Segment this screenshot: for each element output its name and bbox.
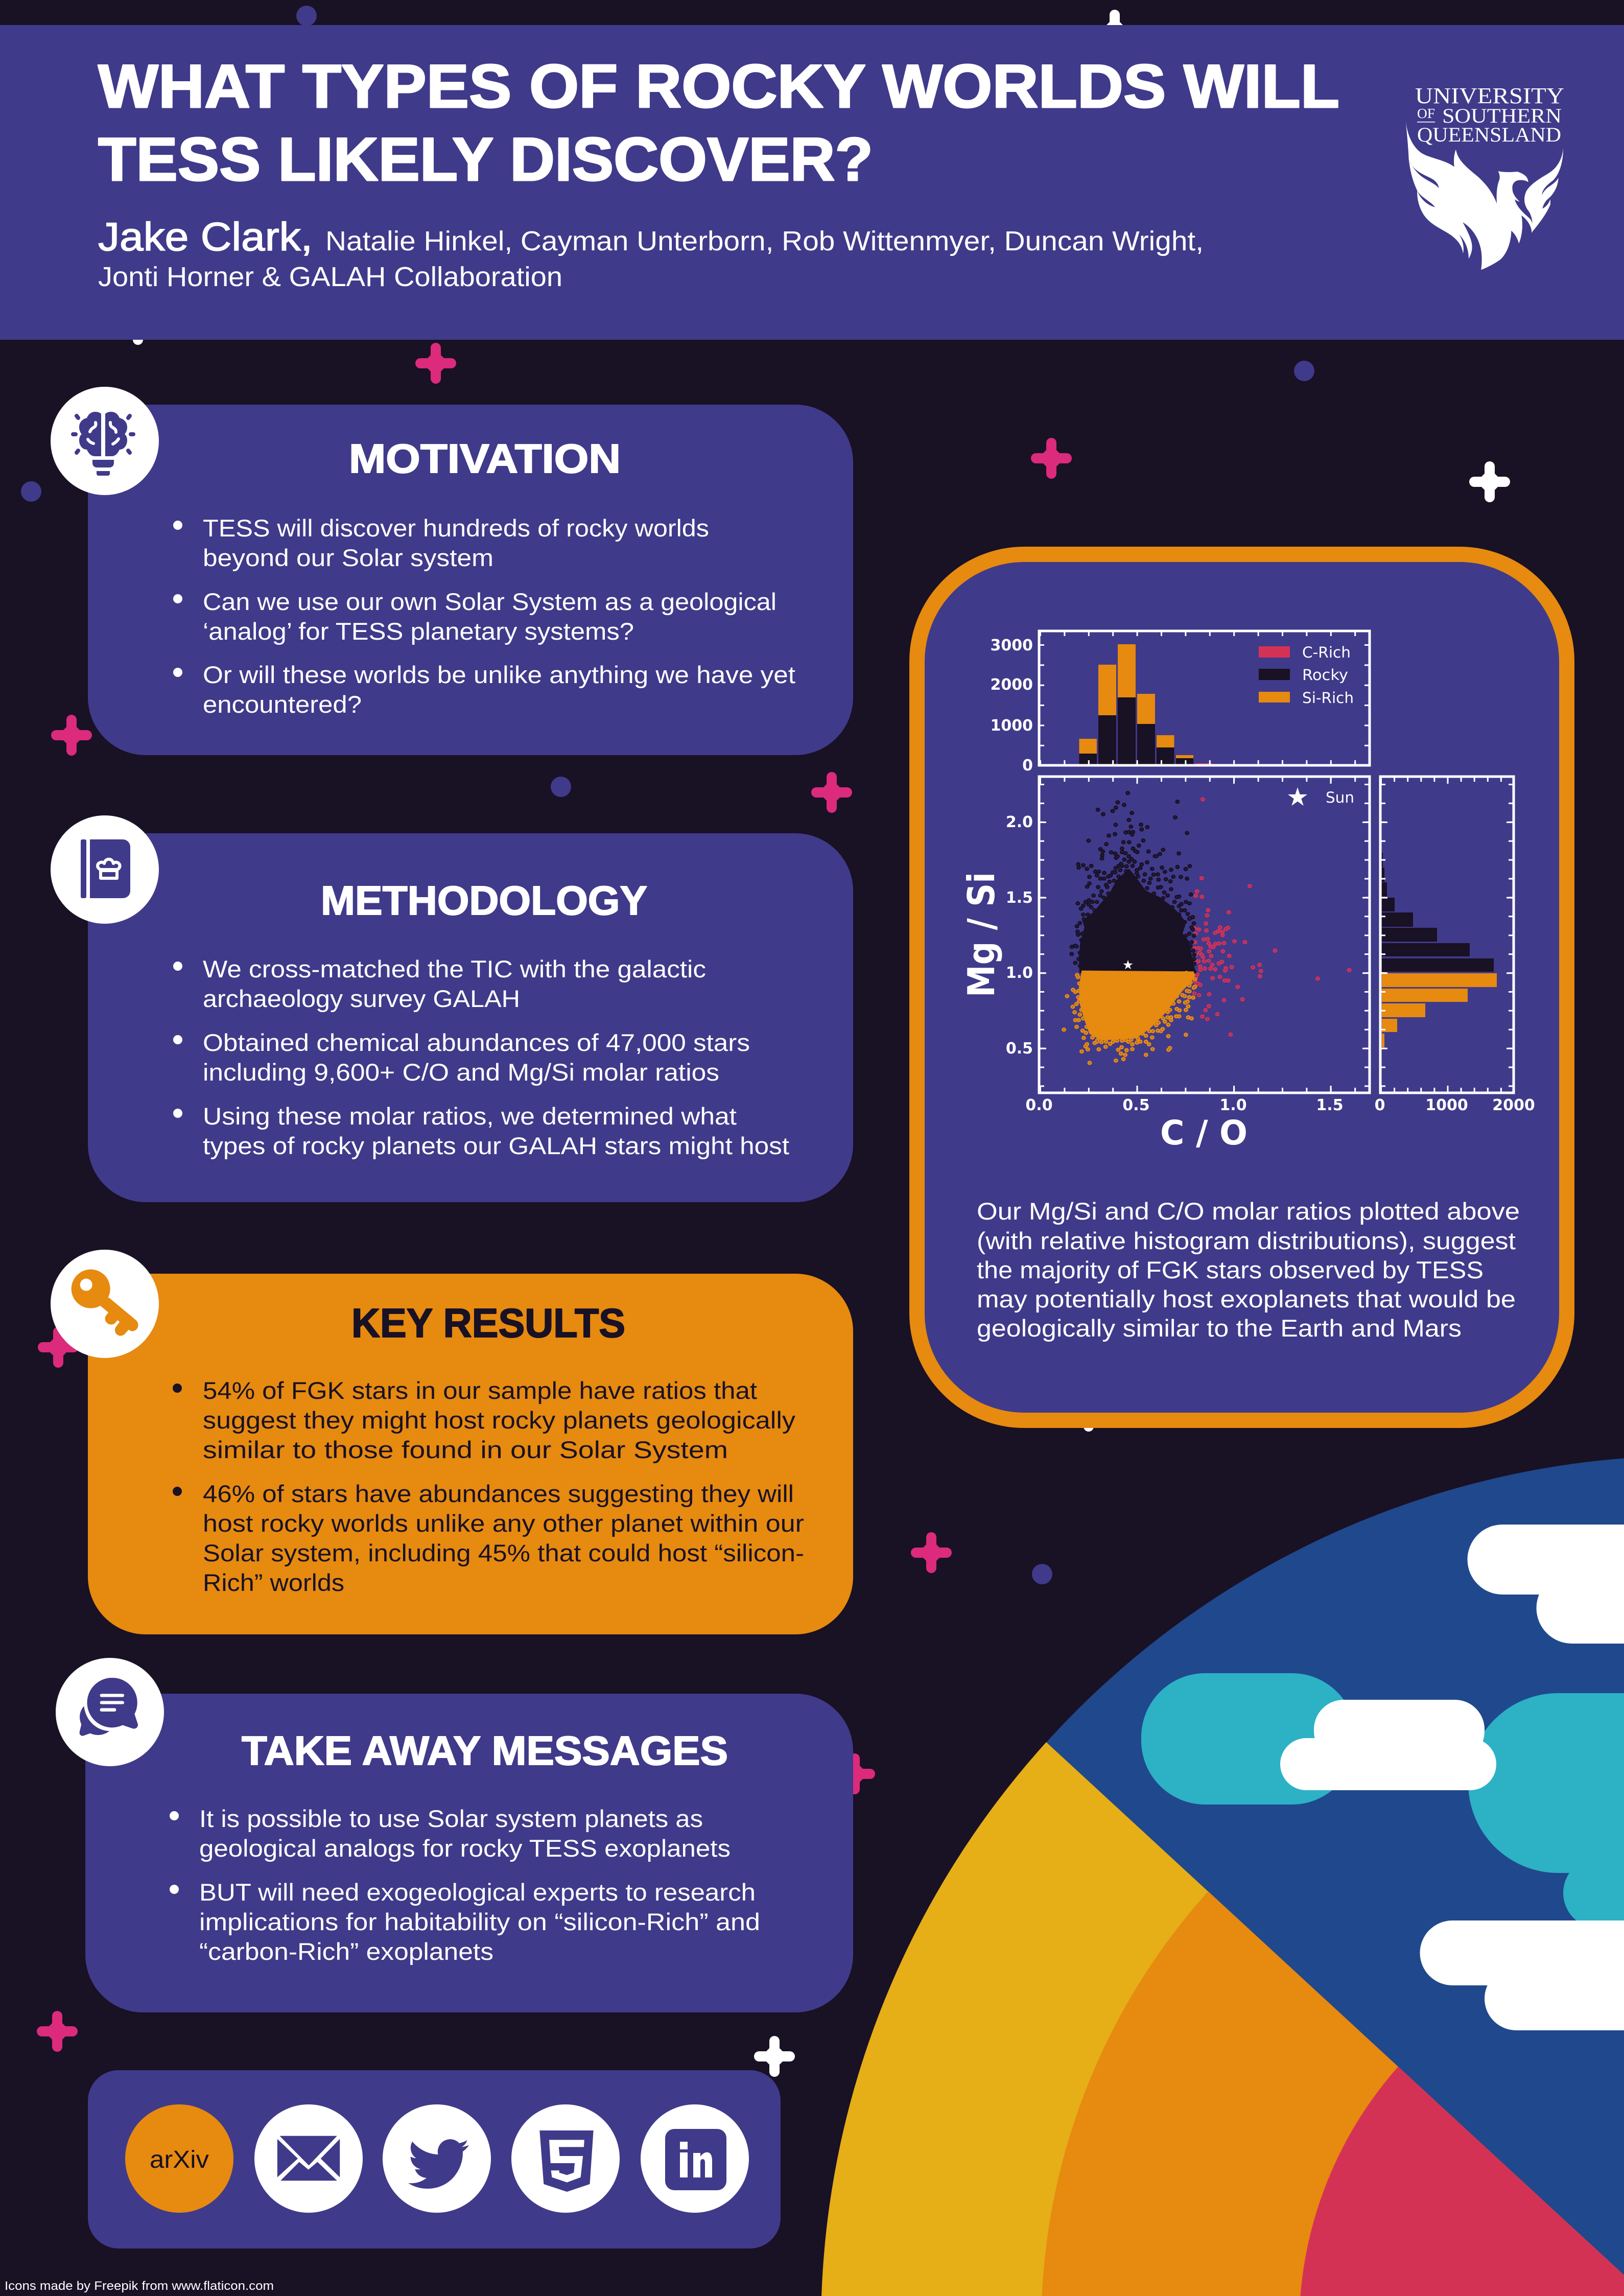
sun legend xyxy=(1288,787,1354,806)
icon: brain bulb xyxy=(51,387,159,495)
sun legend: Sun xyxy=(1326,789,1354,806)
bullet list: Using these molar ratios, we determined what xyxy=(203,1103,737,1130)
bullet list: including 9,600+ C/O and Mg/Si molar ratios xyxy=(203,1059,719,1086)
chart description: the majority of FGK stars observed by TESS xyxy=(977,1256,1484,1283)
bullet list: “carbon-Rich” exoplanets xyxy=(199,1938,493,1965)
chart description: (with relative histogram distributions), suggest xyxy=(977,1227,1516,1254)
top histogram: 2000 xyxy=(990,676,1033,694)
chart description: Our Mg/Si and C/O molar ratios plotted above xyxy=(977,1198,1520,1225)
bullet list xyxy=(173,955,789,1159)
chart description: may potentially host exoplanets that would be xyxy=(977,1285,1516,1313)
bullet list: encountered? xyxy=(203,691,362,718)
bullet list: Solar system, including 45% that could host “silicon- xyxy=(203,1539,804,1566)
title: TESS LIKELY DISCOVER? xyxy=(98,125,873,194)
bullet list: similar to those found in our Solar System xyxy=(203,1436,728,1463)
bullet list: ‘analog’ for TESS planetary systems? xyxy=(203,618,634,645)
university logo xyxy=(1405,83,1564,270)
bullet list: host rocky worlds unlike any other planet within our xyxy=(203,1510,804,1537)
icon: linkedin xyxy=(641,2104,749,2213)
bullet list: It is possible to use Solar system planets as xyxy=(199,1805,703,1832)
icon: twitter xyxy=(383,2104,491,2213)
bullet list xyxy=(173,1377,804,1596)
bullet list: TESS will discover hundreds of rocky worlds xyxy=(203,514,709,542)
title xyxy=(98,52,1339,194)
bullet list: Rich” worlds xyxy=(203,1569,344,1596)
bullet list: We cross-matched the TIC with the galactic xyxy=(203,955,706,982)
heading: METHODOLOGY xyxy=(321,878,647,923)
legend: Si-Rich xyxy=(1302,689,1354,707)
university logo: OF xyxy=(1417,106,1435,121)
top histogram: 3000 xyxy=(990,637,1033,654)
header banner xyxy=(0,25,1624,340)
scatter plot: 0.5 xyxy=(1006,1040,1033,1058)
bullet list: Obtained chemical abundances of 47,000 stars xyxy=(203,1029,750,1056)
top histogram xyxy=(990,631,1370,775)
university logo: UNIVERSITY xyxy=(1415,83,1564,108)
legend: Rocky xyxy=(1302,666,1348,684)
bullet list: 54% of FGK stars in our sample have ratios that xyxy=(203,1377,757,1404)
right histogram: 0 xyxy=(1375,1096,1385,1114)
scatter plot: 2.0 xyxy=(1006,813,1033,831)
authors xyxy=(98,214,1204,292)
panel: methodology xyxy=(51,815,853,1202)
icon: arXiv: arXiv xyxy=(150,2146,209,2173)
right histogram xyxy=(1375,777,1535,1114)
bullet list: types of rocky planets our GALAH stars might host xyxy=(203,1132,789,1159)
right histogram: 1000 xyxy=(1425,1096,1468,1114)
bullet list: implications for habitability on “silicon-Rich” and xyxy=(199,1908,760,1935)
heading: MOTIVATION xyxy=(349,436,621,481)
bullet list: 46% of stars have abundances suggesting they will xyxy=(203,1480,794,1507)
bullet list: archaeology survey GALAH xyxy=(203,985,520,1012)
authors: Natalie Hinkel, Cayman Unterborn, Rob Wittenmyer, Duncan Wright, xyxy=(325,226,1204,256)
icon: email xyxy=(254,2104,363,2213)
x axis title: C / O xyxy=(1160,1113,1248,1153)
authors: Jonti Horner & GALAH Collaboration xyxy=(98,262,562,292)
right histogram: 2000 xyxy=(1492,1096,1535,1114)
bullet list: BUT will need exogeological experts to research xyxy=(199,1879,756,1906)
icon: html5 xyxy=(511,2104,620,2213)
scatter plot: 1.5 xyxy=(1006,889,1033,907)
bullet list xyxy=(173,514,795,718)
panel: links xyxy=(88,2070,781,2248)
purple star dots xyxy=(21,6,1314,1584)
university logo: SOUTHERN xyxy=(1442,104,1562,127)
bullet list: suggest they might host rocky planets geologically xyxy=(203,1407,796,1434)
title: WHAT TYPES OF ROCKY WORLDS WILL xyxy=(98,52,1339,121)
scatter plot: 0.5 xyxy=(1122,1096,1150,1114)
bullet list: Can we use our own Solar System as a geological xyxy=(203,588,776,615)
icon: recipe book xyxy=(51,815,159,924)
scatter points xyxy=(1064,793,1349,1063)
icon: chat bubbles xyxy=(56,1658,164,1766)
top histogram: 1000 xyxy=(990,717,1033,735)
scatter plot: 0.0 xyxy=(1025,1096,1053,1114)
panel: key results xyxy=(51,1250,853,1634)
icon: arXiv xyxy=(125,2104,233,2213)
planet illustration xyxy=(821,1458,1624,2296)
bullet list: beyond our Solar system xyxy=(203,544,493,571)
authors: Jake Clark, xyxy=(98,214,313,259)
icon: key xyxy=(51,1250,159,1358)
scatter plot: 1.0 xyxy=(1006,964,1033,982)
panel: chart xyxy=(917,554,1567,1420)
heading: KEY RESULTS xyxy=(351,1300,625,1346)
panel: motivation xyxy=(51,387,853,755)
university logo: QUEENSLAND xyxy=(1417,123,1561,146)
scatter plot xyxy=(960,777,1370,1153)
legend: C-Rich xyxy=(1302,644,1351,661)
attribution: Icons made by Freepik from www.flaticon.com xyxy=(5,2279,274,2293)
legend xyxy=(1259,644,1354,707)
scatter plot: 1.5 xyxy=(1316,1096,1344,1114)
chart description: geologically similar to the Earth and Mars xyxy=(977,1315,1462,1342)
y axis title: Mg / Si xyxy=(960,872,1003,997)
bullet list: geological analogs for rocky TESS exoplanets xyxy=(199,1835,731,1862)
bullet list: Or will these worlds be unlike anything we have yet xyxy=(203,661,795,688)
bullet list xyxy=(170,1805,760,1965)
sun marker xyxy=(1123,960,1133,969)
heading: TAKE AWAY MESSAGES xyxy=(242,1728,728,1773)
scatter plot: 1.0 xyxy=(1219,1096,1247,1114)
top histogram: 0 xyxy=(1022,757,1033,775)
panel: take away messages xyxy=(56,1658,853,2012)
chart description xyxy=(977,1198,1520,1342)
